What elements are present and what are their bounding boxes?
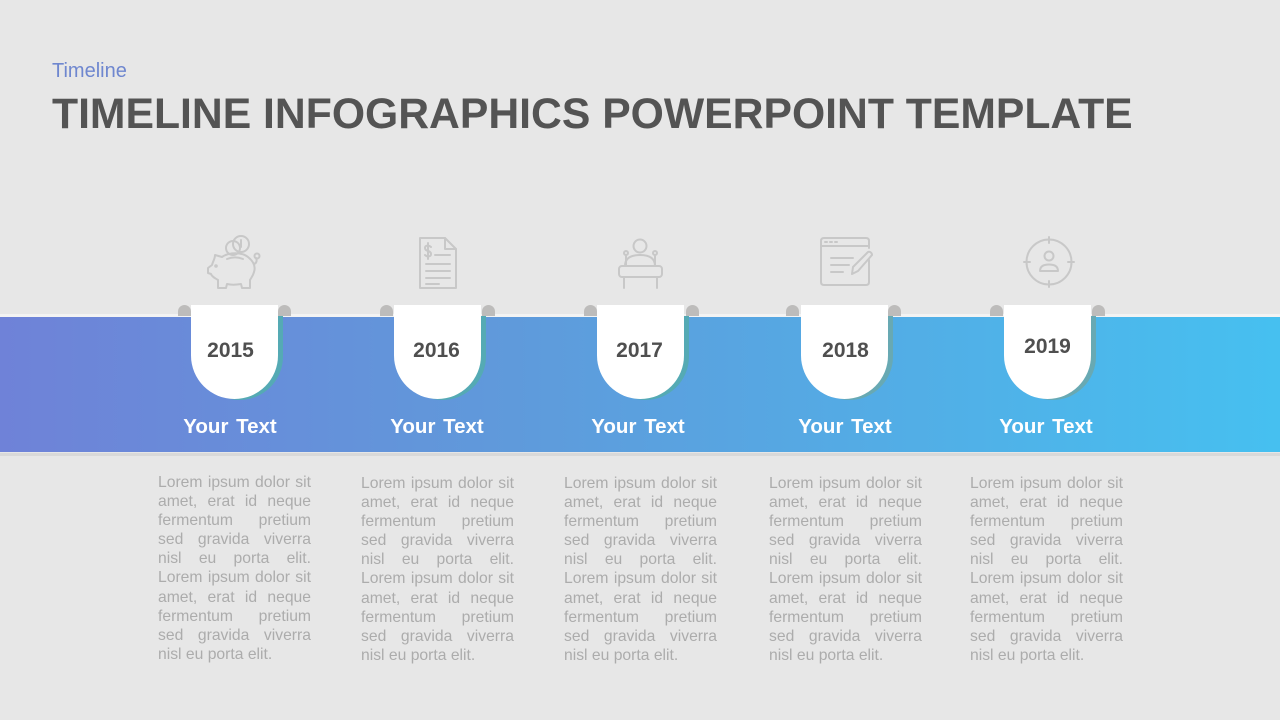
text block 2019: nisl eu porta elit. [970,551,1123,568]
text block 2016: nisl eu porta elit. [361,551,514,568]
text block 2016: nisl eu porta elit. [361,647,475,664]
text block 2015: sed gravida viverra [158,627,311,644]
text block 2019: Lorem ipsum dolor sit [970,475,1123,492]
text block 2018: fermentum pretium [769,609,922,626]
text block 2019: fermentum pretium [970,513,1123,530]
text block 2017: nisl eu porta elit. [564,551,717,568]
label: 2016 Your Text: Your Text [390,415,484,438]
text block 2015: sed gravida viverra [158,531,311,548]
year tab 2015: 2015 [207,339,254,362]
title: TIMELINE INFOGRAPHICS POWERPOINT TEMPLATE [52,90,1133,138]
text block 2015: Lorem ipsum dolor sit [158,474,311,491]
text block 2019: fermentum pretium [970,609,1123,626]
text block 2019 [970,475,1123,664]
text block 2015 [158,474,311,663]
icon: speaker at podium [618,238,663,289]
text block 2018: amet, erat id neque [769,494,922,511]
label: 2019 Your Text: Your Text [999,415,1093,438]
year tab 2019 [990,305,1105,400]
text block 2016: sed gravida viverra [361,628,514,645]
text block 2017: sed gravida viverra [564,532,717,549]
icon: browser window with pencil [820,237,873,286]
text block 2016: fermentum pretium [361,609,514,626]
year tab 2019: 2019 [1024,335,1071,358]
text block 2015: amet, erat id neque [158,493,311,510]
text block 2015: nisl eu porta elit. [158,646,272,663]
text block 2019: sed gravida viverra [970,532,1123,549]
text block 2015: fermentum pretium [158,608,311,625]
text block 2016: Lorem ipsum dolor sit [361,475,514,492]
year tab 2017 [584,305,699,400]
text block 2017: amet, erat id neque [564,494,717,511]
label: 2017 Your Text: Your Text [591,415,685,438]
text block 2019: amet, erat id neque [970,494,1123,511]
label: 2018 Your Text: Your Text [798,415,892,438]
year tab 2018: 2018 [822,339,869,362]
text block 2018: sed gravida viverra [769,628,922,645]
text block 2018: nisl eu porta elit. [769,551,922,568]
text block 2017 [564,475,717,664]
icon: target person [1023,236,1075,288]
icon: invoice document [419,237,457,289]
text block 2017: sed gravida viverra [564,628,717,645]
text block 2019: sed gravida viverra [970,628,1123,645]
text block 2017: Lorem ipsum dolor sit [564,475,717,492]
text block 2017: nisl eu porta elit. [564,647,678,664]
text block 2017: fermentum pretium [564,513,717,530]
text block 2018: nisl eu porta elit. [769,647,883,664]
year tab 2015 [178,305,291,400]
text block 2015: Lorem ipsum dolor sit [158,569,311,586]
text block 2017: fermentum pretium [564,609,717,626]
text block 2015: fermentum pretium [158,512,311,529]
text block 2016 [361,475,514,664]
text block 2019: nisl eu porta elit. [970,647,1084,664]
year tab 2016 [380,305,495,400]
text block 2018: sed gravida viverra [769,532,922,549]
text block 2018: Lorem ipsum dolor sit [769,475,922,492]
text block 2015: nisl eu porta elit. [158,550,311,567]
text block 2016: sed gravida viverra [361,532,514,549]
text block 2017: amet, erat id neque [564,590,717,607]
text block 2016: Lorem ipsum dolor sit [361,570,514,587]
text block 2016: amet, erat id neque [361,590,514,607]
text block 2019: Lorem ipsum dolor sit [970,570,1123,587]
text block 2015: amet, erat id neque [158,589,311,606]
text block 2018: Lorem ipsum dolor sit [769,570,922,587]
text block 2017: Lorem ipsum dolor sit [564,570,717,587]
label: 2015 Your Text: Your Text [183,415,277,438]
text block 2018: amet, erat id neque [769,590,922,607]
year tab 2018 [786,305,901,400]
text block 2016: fermentum pretium [361,513,514,530]
text block 2019: amet, erat id neque [970,590,1123,607]
text block 2018: fermentum pretium [769,513,922,530]
text block 2018 [769,475,922,664]
text block 2016: amet, erat id neque [361,494,514,511]
timeline band [0,314,1280,456]
icon: piggy bank [207,235,260,289]
year tab 2016: 2016 [413,339,460,362]
subtitle: Timeline: Timeline [52,60,127,82]
year tab 2017: 2017 [616,339,663,362]
